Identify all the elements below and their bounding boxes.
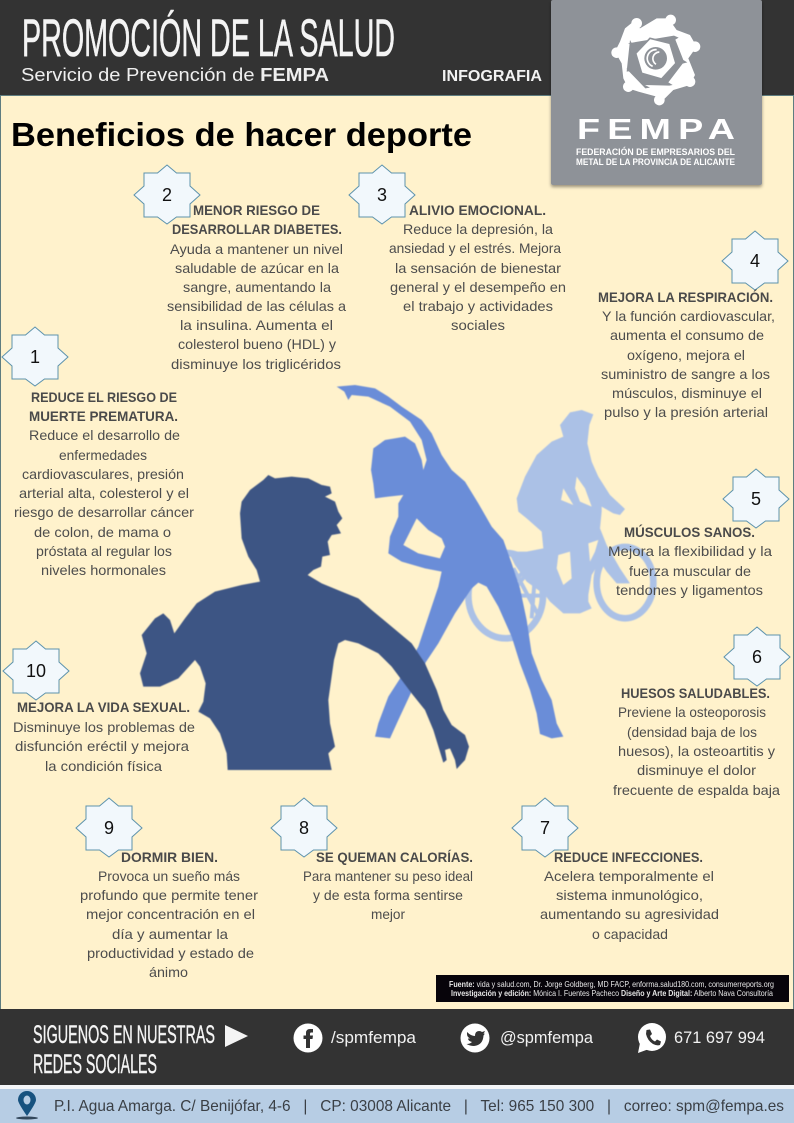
benefit 10 (3, 641, 195, 774)
header subtitle: Servicio de Prevención de FEMPA (21, 65, 329, 85)
text 3: la sensación de bienestar (395, 260, 561, 276)
FEMPA logo panel (551, 0, 762, 185)
infografia label: INFOGRAFIA (442, 68, 542, 85)
text 9: día y aumentar la (112, 926, 228, 942)
benefit 2 (134, 165, 346, 372)
facebook handle: /spmfempa (331, 1028, 417, 1047)
heading 1: REDUCE EL RIESGO DE (31, 389, 177, 405)
heading 6: HUESOS SALUDABLES. (621, 685, 770, 701)
text 3: el trabajo y actividades (403, 298, 553, 314)
icon: FEMPA nut and puzzle ring (611, 15, 700, 105)
text 5: Mejora la flexibilidad y la (608, 543, 772, 559)
text 2: colesterol bueno (HDL) y (178, 336, 336, 352)
heading 10: MEJORA LA VIDA SEXUAL. (17, 699, 190, 715)
benefit 7 (512, 798, 719, 942)
text 1: de colon, de mama o (34, 524, 171, 540)
badge 10: 10 (26, 661, 46, 681)
text 4: aumenta el consumo de (610, 327, 764, 343)
text 1: cardiovasculares, presión (22, 466, 184, 482)
text 7: Acelera temporalmente el (544, 868, 714, 884)
badge 5 (723, 469, 789, 528)
text 8: y de esta forma sentirse (313, 887, 463, 903)
text 2: disminuye los triglicéridos (171, 356, 341, 372)
follow us heading: REDES SOCIALES (33, 1049, 157, 1079)
text 6: huesos), la osteoartitis y (618, 743, 775, 759)
text 9: mejor concentración en el (86, 906, 255, 922)
heading 2 (172, 202, 342, 237)
badge 3: 3 (377, 185, 387, 205)
heading 8: SE QUEMAN CALORÍAS. (316, 849, 473, 865)
text 7 (540, 868, 719, 942)
benefit 1 (2, 327, 194, 578)
icon: twitter (460, 1024, 490, 1052)
badge 8 (271, 798, 337, 857)
address bar (0, 1085, 794, 1123)
heading 7: REDUCE INFECCIONES. (554, 849, 703, 865)
benefit 3 (349, 165, 566, 333)
text 7: aumentando su agresividad (540, 906, 719, 922)
illustration: stretching figure silhouette (337, 385, 563, 738)
arrow (225, 1025, 248, 1047)
benefit 5 (608, 469, 789, 598)
text 2 (167, 241, 346, 372)
badge 3 (349, 165, 415, 224)
text 4: oxígeno, mejora el (627, 347, 745, 363)
heading 1: MUERTE PREMATURA. (29, 408, 178, 424)
badge 2: 2 (162, 185, 172, 205)
heading 3: ALIVIO EMOCIONAL. (409, 202, 546, 218)
badge 4: 4 (750, 251, 760, 271)
text 1: enfermedades (59, 447, 147, 463)
text 2: saludable de azúcar en la (175, 260, 339, 276)
text 5: tendones y ligamentos (616, 582, 763, 598)
text 6: Previene la osteoporosis (618, 704, 766, 720)
text 9: ánimo (149, 964, 188, 980)
illustration: cyclist silhouette (468, 410, 653, 638)
text 8: mejor (371, 906, 405, 922)
text 4: suministro de sangre a los (601, 366, 770, 382)
badge 7 (512, 798, 578, 857)
follow us heading: SIGUENOS EN NUESTRAS (33, 1021, 215, 1049)
heading 2: DESARROLLAR DIABETES. (172, 221, 342, 237)
text 1: arterial alta, colesterol y el (19, 485, 189, 501)
text 1: niveles hormonales (41, 562, 166, 578)
text 4: pulso y la presión arterial (604, 404, 768, 420)
heading 1 (29, 389, 178, 424)
twitter handle: @spmfempa (500, 1028, 594, 1047)
text 3: ansiedad y el estrés. Mejora (389, 240, 561, 256)
text 3: Reduce la depresión, la (403, 221, 553, 237)
text 7: o capacidad (592, 926, 668, 942)
header title: PROMOCIÓN DE LA SALUD (22, 9, 395, 68)
text 2: la insulina. Aumenta el (180, 317, 333, 333)
phone number: 671 697 994 (674, 1028, 765, 1047)
badge 1: 1 (30, 347, 40, 367)
text 7: sistema inmunológico, (556, 887, 703, 903)
icon: whatsapp (638, 1023, 666, 1053)
text 3 (389, 221, 566, 333)
badge 7: 7 (540, 818, 550, 838)
text 10: Disminuye los problemas de (13, 719, 195, 735)
text 2: sangre, aumentando la (183, 279, 331, 295)
badge 5: 5 (751, 489, 761, 509)
benefit 8 (271, 798, 473, 922)
text 10: la condición física (45, 758, 162, 774)
text 4 (601, 308, 775, 420)
text 9: profundo que permite tener (80, 887, 258, 903)
badge 10 (3, 641, 69, 700)
text 8 (303, 868, 473, 922)
text 6: (densidad baja de los (627, 724, 757, 740)
text 1 (14, 427, 194, 578)
text 10 (13, 719, 195, 774)
main title: Beneficios de hacer deporte (11, 116, 472, 153)
text 2: Ayuda a mantener un nivel (170, 241, 343, 257)
text 1: próstata al regular los (36, 543, 172, 559)
badge 1 (2, 327, 68, 386)
FEMPA wordmark: FEMPA (577, 114, 735, 146)
text 9: Provoca un sueño más (98, 868, 240, 884)
text 4: músculos, disminuye el (612, 385, 762, 401)
federation name line 1: FEDERACIÓN DE EMPRESARIOS DEL (576, 146, 735, 158)
icon: facebook (294, 1024, 322, 1052)
benefit 4 (598, 231, 788, 420)
heading 2: MENOR RIESGO DE (193, 202, 320, 218)
benefit 6 (613, 627, 790, 798)
text 4: Y la función cardiovascular, (602, 308, 775, 324)
social footer band (0, 1009, 794, 1085)
text 2: sensibilidad de las células a (167, 298, 346, 314)
federation name line 2: METAL DE LA PROVINCIA DE ALICANTE (576, 157, 735, 168)
text 6: disminuye el dolor (637, 762, 756, 778)
address text: P.I. Agua Amarga. C/ Benijófar, 4-6 | CP: 03008 Alicante | Tel: 965 150 300 | correo: spm@fempa.es (54, 1098, 784, 1115)
heading 4: MEJORA LA RESPIRACIÓN. (598, 288, 773, 305)
text 8: Para mantener su peso ideal (303, 868, 473, 884)
illustration: dark figure silhouette (140, 475, 469, 770)
badge 6: 6 (752, 647, 762, 667)
badge 8: 8 (299, 818, 309, 838)
text 1: Reduce el desarrollo de (29, 427, 180, 443)
heading 9: DORMIR BIEN. (121, 849, 218, 865)
badge 2 (134, 165, 200, 224)
badge 9: 9 (104, 818, 114, 838)
text 9: productividad y estado de (87, 945, 254, 961)
benefit 9 (76, 798, 258, 980)
text 3: sociales (451, 317, 505, 333)
source credits box (436, 975, 789, 1002)
text 5 (608, 543, 772, 598)
text 6: frecuente de espalda baja (613, 782, 780, 798)
heading 5: MÚSCULOS SANOS. (624, 523, 755, 540)
text 9 (80, 868, 258, 980)
badge 9 (76, 798, 142, 857)
text 1: riesgo de desarrollar cáncer (14, 504, 194, 520)
text 3: general y el desempeño en (390, 279, 566, 295)
text 10: disfunción eréctil y mejora (15, 738, 189, 754)
icon: location pin (16, 1091, 38, 1120)
source credits box: Investigación y edición: Mónica I. Fuentes Pacheco Diseño y Arte Digital: Alberto Nava Consultoría (451, 989, 773, 998)
badge 6 (724, 627, 790, 686)
follow us heading (33, 1021, 215, 1079)
text 5: fuerza muscular de (629, 563, 751, 579)
header band (0, 0, 794, 95)
badge 4 (722, 231, 788, 290)
text 6 (613, 704, 780, 798)
